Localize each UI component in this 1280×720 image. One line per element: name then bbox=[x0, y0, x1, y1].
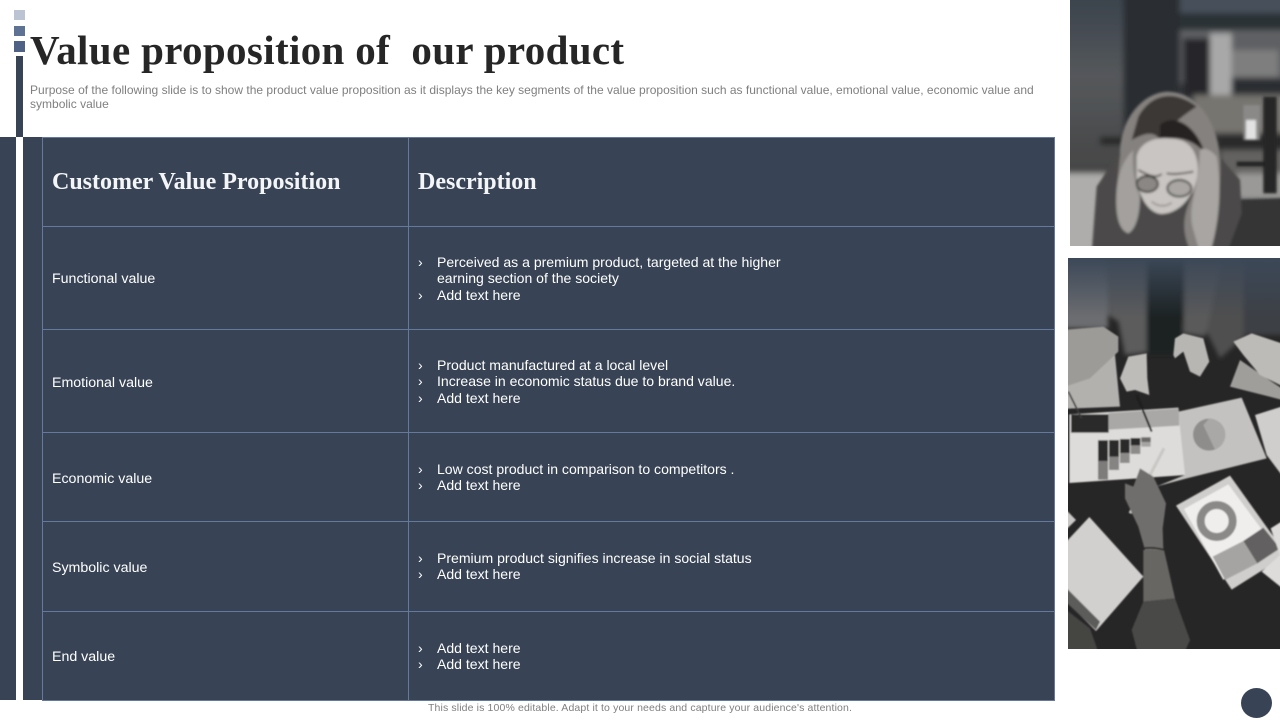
row description: functional value: Perceived as a premium product, targeted at the higher bbox=[437, 254, 781, 270]
table panel: customer value proposition bbox=[42, 137, 1055, 701]
left band: outer bbox=[0, 137, 16, 700]
table header: column 1: Customer Value Proposition bbox=[52, 169, 340, 195]
row label: economic value: Economic value bbox=[52, 471, 152, 487]
row description: emotional value: Increase in economic status due to brand value. bbox=[437, 373, 735, 389]
row description: end value bbox=[418, 640, 521, 672]
row label: symbolic value: Symbolic value bbox=[52, 560, 147, 576]
row label: end value: End value bbox=[52, 649, 115, 665]
row label: emotional value: Emotional value bbox=[52, 375, 153, 391]
row description: economic value: Add text here bbox=[437, 477, 521, 493]
title: Value proposition of our product bbox=[30, 27, 624, 73]
row description: end value: Add text here bbox=[437, 640, 521, 656]
row description: economic value: Low cost product in comparison to competitors . bbox=[437, 461, 734, 477]
page number circle bbox=[1241, 688, 1272, 718]
footer note: This slide is 100% editable. Adapt it to your needs and capture your audience's attention. bbox=[428, 702, 852, 714]
row description: emotional value: Add text here bbox=[437, 390, 521, 406]
decorative squares: top left bbox=[14, 10, 25, 52]
row description: economic value bbox=[418, 461, 734, 493]
row label: functional value: Functional value bbox=[52, 271, 155, 287]
row description: symbolic value bbox=[418, 550, 752, 582]
left band: inner bbox=[23, 137, 43, 700]
row description: end value: Add text here bbox=[437, 656, 521, 672]
row description: functional value: Add text here bbox=[437, 287, 521, 303]
row description: symbolic value: Premium product signifies increase in social status bbox=[437, 550, 752, 566]
table header: column 2: Description bbox=[418, 169, 537, 195]
subtitle text block: Purpose of the following slide is to show the product value proposition as it displays the key segments of the value proposition such as functional value, emotional value, economic value and symbolic value bbox=[30, 83, 1034, 110]
left accent bar: top bbox=[16, 56, 23, 137]
photo: team reviewing charts on a table bbox=[1068, 258, 1280, 649]
row description: emotional value: Product manufactured at a local level bbox=[437, 357, 668, 373]
photo: woman with glasses bbox=[1070, 0, 1280, 246]
row description: functional value bbox=[418, 254, 781, 303]
row description: functional value: earning section of the society bbox=[437, 270, 619, 286]
row description: symbolic value: Add text here bbox=[437, 566, 521, 582]
row description: emotional value bbox=[418, 357, 735, 406]
